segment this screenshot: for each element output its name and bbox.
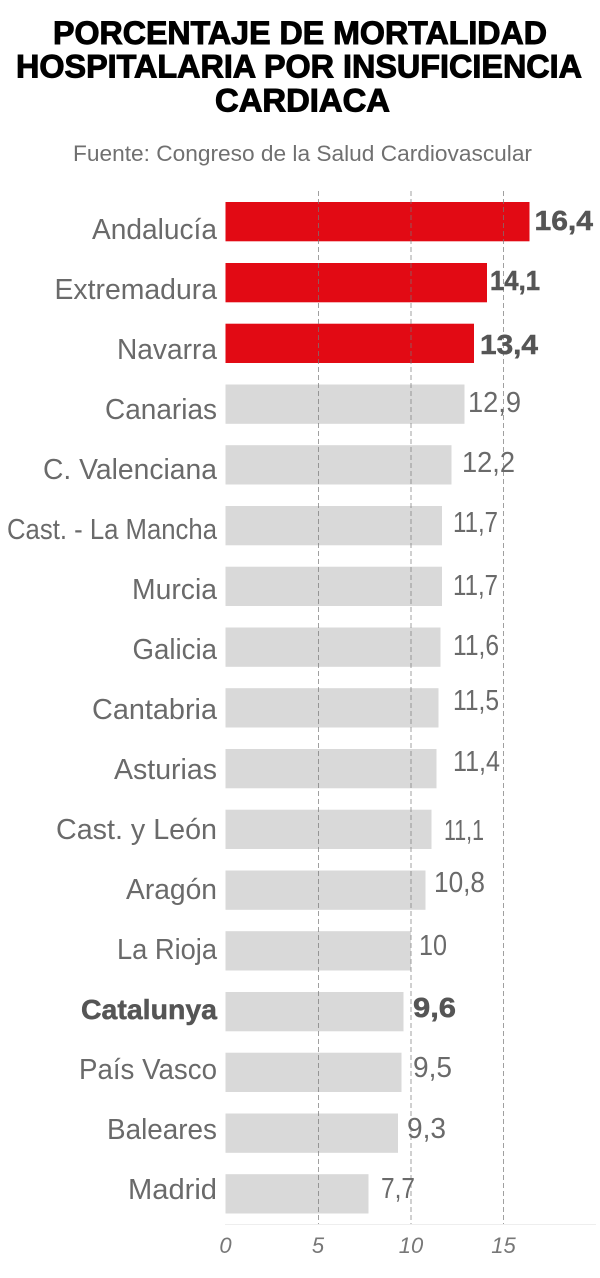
source text: Fuente: Congreso de la Salud Cardiovascular xyxy=(73,141,532,166)
title: PORCENTAJE DE MORTALIDAD xyxy=(53,15,547,51)
value labels: 12,9 xyxy=(468,387,521,419)
region labels: Cantabria xyxy=(92,694,218,726)
region labels: La Rioja xyxy=(117,934,218,966)
region labels: Cast. y León xyxy=(56,814,217,846)
axis tick labels: 10 xyxy=(399,1233,424,1258)
region labels: Galicia xyxy=(132,634,218,666)
axis tick labels: 15 xyxy=(491,1233,516,1258)
value labels: 11,6 xyxy=(453,630,499,662)
value labels: 7,7 xyxy=(381,1173,415,1205)
region labels: Canarias xyxy=(105,394,217,426)
region labels: Navarra xyxy=(117,334,218,366)
value labels: 11,1 xyxy=(444,815,484,847)
value labels: 11,5 xyxy=(453,685,499,717)
region labels: Andalucía xyxy=(92,214,218,246)
bars xyxy=(226,202,530,1214)
value labels: 11,4 xyxy=(453,746,500,778)
title: CARDIACA xyxy=(215,82,390,118)
region labels: Aragón xyxy=(126,874,217,906)
value labels xyxy=(381,205,593,1205)
value labels: 13,4 xyxy=(480,329,538,360)
value labels: 16,4 xyxy=(534,205,593,236)
axis tick labels: 5 xyxy=(312,1233,325,1258)
value labels: 11,7 xyxy=(453,570,498,602)
value labels: 9,3 xyxy=(407,1113,446,1145)
title: HOSPITALARIA POR INSUFICIENCIA xyxy=(16,48,582,84)
region labels: Catalunya xyxy=(81,994,217,1025)
region labels: Asturias xyxy=(114,754,217,786)
region labels: País Vasco xyxy=(79,1054,217,1086)
value labels: 14,1 xyxy=(490,265,540,296)
value labels: 9,5 xyxy=(413,1052,452,1084)
value labels: 10,8 xyxy=(434,867,485,899)
region labels: Cast. - La Mancha xyxy=(7,514,218,546)
title xyxy=(16,15,582,118)
axis tick labels xyxy=(219,1233,516,1258)
value labels: 10 xyxy=(419,930,447,962)
region labels xyxy=(7,214,218,1206)
region labels: Madrid xyxy=(128,1174,217,1206)
region labels: C. Valenciana xyxy=(43,454,218,486)
region labels: Extremadura xyxy=(54,274,218,306)
region labels: Baleares xyxy=(107,1114,217,1146)
value labels: 11,7 xyxy=(453,507,498,539)
value labels: 12,2 xyxy=(462,447,515,479)
grid lines xyxy=(318,191,504,1224)
region labels: Murcia xyxy=(132,574,218,606)
value labels: 9,6 xyxy=(413,992,456,1023)
axis tick labels: 0 xyxy=(219,1233,232,1258)
axis line xyxy=(225,1224,596,1226)
